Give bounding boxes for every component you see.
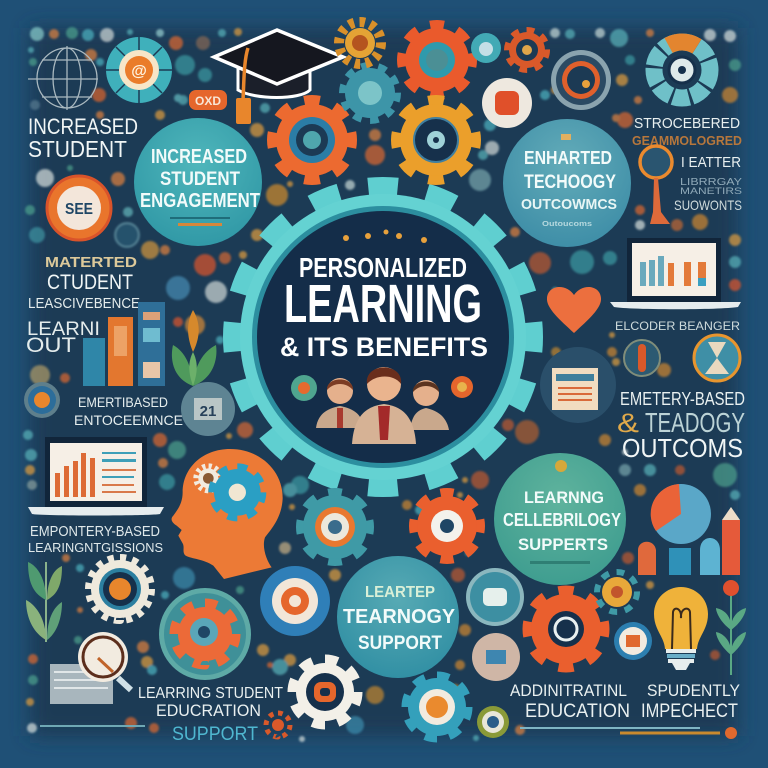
gear: teal with orange ring xyxy=(301,493,369,561)
icon: laptop with bars xyxy=(28,437,164,516)
circle: learning celebrilogy supports: SUPPERTS xyxy=(518,535,608,554)
icon: orange badge: SEE xyxy=(65,201,93,218)
chart: pie xyxy=(651,484,711,544)
circle: learner technology support: TEARNOGY xyxy=(343,606,456,628)
circle: increased student engagement: ENGAGEMENT xyxy=(140,190,260,212)
title: LEARNING xyxy=(284,274,482,334)
bottom left doodle line xyxy=(40,725,145,727)
text: administration education: EDUCATION xyxy=(525,701,630,722)
text: mastered student: CTUDENT xyxy=(47,271,133,294)
text: increased student: INCREASED xyxy=(28,114,138,139)
text: administration education: ADDINITRATINL xyxy=(510,681,627,700)
icon: head with gears xyxy=(172,449,283,579)
icon: books xyxy=(83,302,165,386)
circle: enhanced technology outcomes: ENHARTED xyxy=(524,148,612,168)
text: student impact: IMPECHECT xyxy=(641,701,738,722)
text: embedded based: EMERTIBASED xyxy=(78,394,168,410)
circle: learner technology support xyxy=(337,556,459,678)
text: mastery-based technology outcomes xyxy=(617,389,745,463)
circle: learner technology support: LEARTEP xyxy=(365,584,435,601)
gear: orange small top xyxy=(507,30,547,70)
text: top right labels xyxy=(632,115,742,213)
text: mastered student xyxy=(26,254,140,357)
text: mastered student: MATERTED xyxy=(45,254,137,271)
person right xyxy=(410,380,449,430)
gear: white bottom xyxy=(292,659,358,725)
small dots above title xyxy=(343,230,427,243)
text: administration education xyxy=(510,681,630,722)
icon: white circle with orange shape xyxy=(482,78,532,128)
text: increased student xyxy=(28,114,138,162)
icon: leaf plant xyxy=(172,310,216,386)
icon: orange label xyxy=(189,90,227,110)
title xyxy=(280,252,488,362)
text: student impact xyxy=(641,681,740,722)
text: embedded based xyxy=(74,394,183,428)
icon: leaf branch xyxy=(26,562,62,642)
icon: document circle xyxy=(540,347,616,423)
text: encoder learner: ELCODER BEANGER xyxy=(615,319,740,333)
circle: enhanced technology outcomes: Outoucoms xyxy=(542,221,592,228)
text: learning student education support: EDUCRATION xyxy=(156,701,261,720)
icon: graduation cap xyxy=(214,30,343,124)
person left xyxy=(316,378,364,428)
circle: learning celebrilogy supports: CELLEBRILOGY xyxy=(503,510,621,530)
gear: orange right of head xyxy=(414,493,480,559)
icon: orange target circle xyxy=(24,382,60,418)
icon: concentric ring xyxy=(551,50,611,110)
icon: pale circle xyxy=(472,633,520,681)
icon: grey circle xyxy=(181,382,235,436)
circle: enhanced technology outcomes xyxy=(503,119,631,247)
gear: orange top centre xyxy=(273,101,351,179)
icon: green circle xyxy=(477,706,509,738)
icon: segmented teal wheel xyxy=(106,37,172,103)
gear: teal gold small xyxy=(597,572,637,612)
text: increased student: STUDENT xyxy=(28,136,127,162)
title: PERSONALIZED xyxy=(299,252,467,283)
chart: bars and pencil xyxy=(638,507,740,575)
gear: red top xyxy=(402,25,472,95)
text: mastery-based technology outcomes: EMETERY-BASED xyxy=(620,389,745,409)
icon: teal circle with orange blob xyxy=(159,588,251,680)
text: top right labels: STROCEBERED xyxy=(634,115,740,132)
text: learning student education support: SUPPORT xyxy=(172,724,258,745)
icon: laptop with bars right xyxy=(610,238,741,309)
circle: increased student engagement: INCREASED xyxy=(151,146,247,168)
text: emportery-based learning: EMPONTERY-BASED xyxy=(30,523,160,540)
circle: enhanced technology outcomes: OUTCOWMCS xyxy=(521,196,617,213)
icon: round badges right xyxy=(624,335,740,381)
chart: segmented ring xyxy=(654,42,710,98)
title: & ITS BENEFITS xyxy=(280,332,488,362)
circle: increased student engagement: STUDENT xyxy=(160,169,240,190)
people group xyxy=(291,367,473,444)
circle: learner technology support: SUPPORT xyxy=(358,633,442,654)
icon: globe xyxy=(28,46,98,110)
circle: learning celebrilogy supports xyxy=(494,453,626,585)
gear: blue xyxy=(260,566,330,636)
text: learning student education support: LEARRING STUDENT xyxy=(138,685,283,702)
person center xyxy=(352,367,416,444)
text: top right labels: GEAMMOLOGRED xyxy=(632,133,742,148)
main gear xyxy=(233,187,533,487)
icon: magnifier xyxy=(640,146,672,224)
icon: light bulb xyxy=(654,587,708,670)
text: mastered student: LEASCIVEBENCE xyxy=(28,295,140,312)
icon: orange label: OXD xyxy=(195,94,221,108)
text: mastered student: OUT xyxy=(26,334,76,357)
text: embedded based: ENTOCEEMNCE xyxy=(74,412,183,428)
gear: teal top xyxy=(343,66,397,120)
text: top right labels: MANETIRS xyxy=(680,186,742,196)
text: mastery-based technology outcomes: OUTCOMS xyxy=(622,433,743,463)
text: top right labels: LIBRRGAY xyxy=(680,177,742,188)
icon: blue ring badge xyxy=(614,622,652,660)
icon: small light circle xyxy=(471,33,501,63)
text: emportery-based learning: LEARINGNTGISSIONS xyxy=(28,540,163,555)
gear: white left xyxy=(89,558,151,620)
text: top right labels: SUOWONTS xyxy=(674,197,742,213)
icon: orange badge xyxy=(47,176,111,240)
gear: orange large bottom xyxy=(528,591,604,667)
gear: yellow xyxy=(397,101,475,179)
icon: sun xyxy=(339,22,381,64)
text: mastered student: LEARNI xyxy=(27,319,100,340)
icon: teal circle xyxy=(466,568,524,626)
text: mastery-based technology outcomes: & xyxy=(617,408,639,438)
icon: segmented teal wheel: @ xyxy=(131,63,147,80)
icon: plant with flower xyxy=(716,580,746,675)
text: student impact: SPUDENTLY xyxy=(647,681,740,700)
gear: teal bottom xyxy=(406,676,468,738)
circle: increased student engagement xyxy=(134,118,262,246)
icon: heart xyxy=(547,287,601,333)
text: learning student education support xyxy=(138,685,283,745)
circle: enhanced technology outcomes: TECHOOGY xyxy=(524,172,616,193)
small gears beside people xyxy=(291,375,473,401)
icon: grey circle: 21 xyxy=(200,403,216,420)
bottom right doodle line xyxy=(520,727,737,739)
icon: magnifier and paper xyxy=(50,632,131,704)
text: top right labels: I EATTER xyxy=(681,154,741,171)
circle: learning celebrilogy supports: LEARNNG xyxy=(524,488,604,507)
gear: small orange bottom xyxy=(266,713,290,737)
text: emportery-based learning xyxy=(28,523,163,555)
